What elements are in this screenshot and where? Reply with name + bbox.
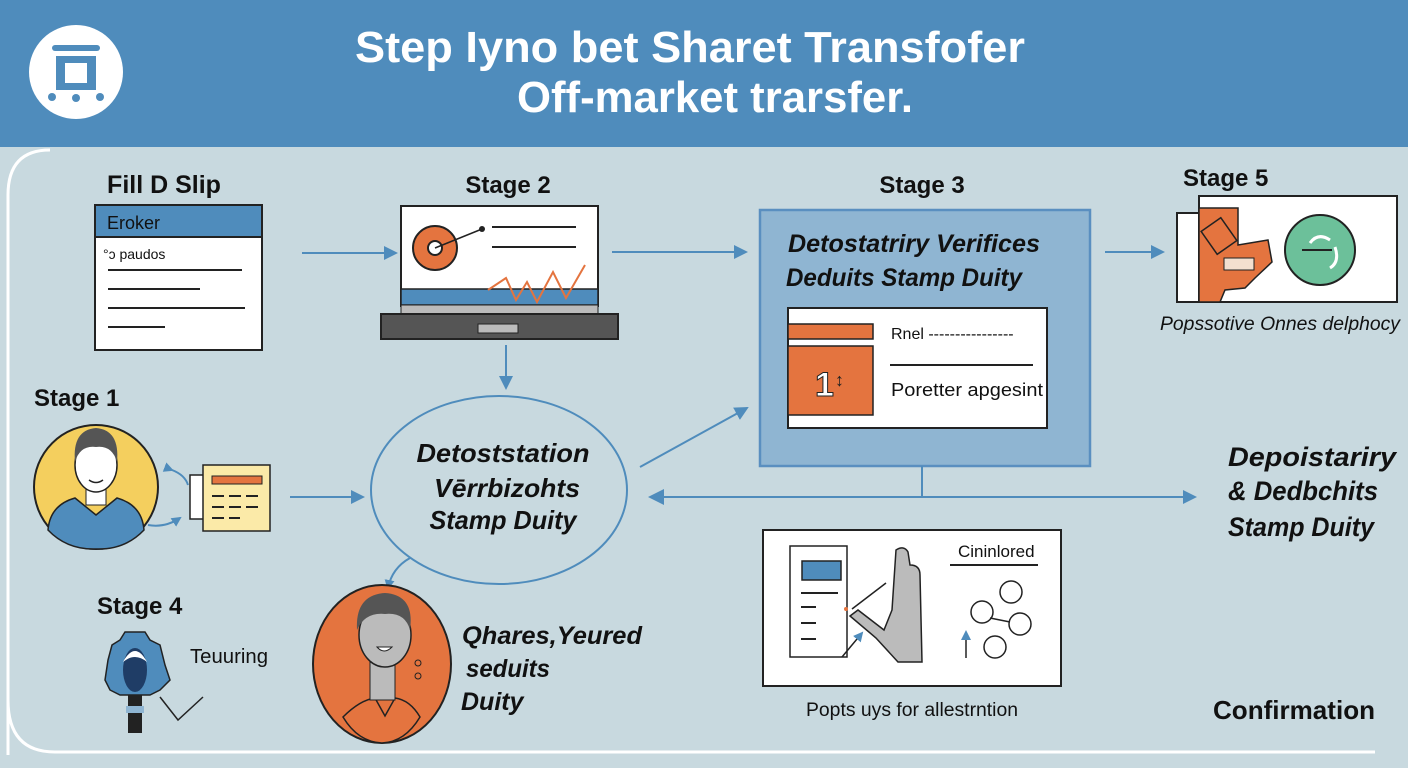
title: Step Iyno bet Sharet Transfofer — [355, 23, 1025, 72]
panel: orange person: Duity — [461, 688, 525, 716]
panel: stage 5: Stage 5 — [1183, 165, 1268, 192]
panel: stage 3: Detostatriry Verifices — [788, 230, 1040, 258]
panel: stage 3: ↕ — [835, 370, 844, 390]
arrow — [505, 345, 507, 388]
panel: stage 4: Stage 4 — [97, 593, 183, 620]
caption: Popts uys for allestrntion — [806, 700, 1018, 721]
panel: central ellipse: Vērrbizohts — [434, 473, 580, 503]
panel: central ellipse — [371, 396, 627, 584]
arrow: bidirectional connector — [648, 466, 1195, 505]
arrow — [612, 251, 746, 253]
arrow — [302, 252, 396, 254]
icon: header logo — [29, 25, 123, 119]
panel: stage 4: Teuuring — [190, 646, 268, 668]
panel: fill slip: °ↄ paudos — [103, 246, 165, 262]
curved arrow — [388, 558, 410, 588]
panel: stage 3: Deduits Stamp Duity — [786, 264, 1023, 292]
text block: depository: Stamp Duity — [1228, 512, 1376, 542]
panel: orange person: Qhares,Yeured — [462, 622, 643, 650]
panel: stage 2 laptop — [381, 172, 618, 339]
panel: stage 3 — [760, 172, 1090, 466]
panel: stage 5 — [1160, 165, 1402, 335]
panel: stage 3: Rnel ---------------- — [891, 326, 1014, 343]
panel: orange person — [313, 585, 643, 743]
panel: orange person: seduits — [466, 655, 550, 683]
panel: stage 4 — [97, 593, 268, 733]
panel: stage 1 — [34, 385, 270, 549]
text block: depository: Depoistariry — [1228, 442, 1398, 472]
panel: confirmation box: Cininlored — [958, 542, 1035, 561]
panel: stage 1: Stage 1 — [34, 385, 119, 412]
panel: stage 5: Popssotive Onnes delphocy — [1160, 314, 1402, 335]
panel: confirmation box — [763, 530, 1061, 686]
panel: central ellipse: Detoststation — [416, 438, 590, 468]
arrow — [290, 496, 363, 498]
text block: depository — [1228, 442, 1398, 542]
panel: central ellipse: Stamp Duity — [430, 505, 578, 535]
arrow — [640, 408, 747, 467]
panel: stage 2 laptop: Stage 2 — [465, 172, 551, 199]
title: Off-market trarsfer. — [517, 73, 913, 122]
text block: depository: & Dedbchits — [1228, 476, 1378, 506]
panel: stage 3: Stage 3 — [879, 172, 965, 199]
text: confirmation: Confirmation — [1213, 695, 1375, 725]
title — [355, 23, 1025, 122]
panel: fill slip — [95, 171, 262, 350]
panel: fill slip: Fill D Slip — [107, 171, 221, 199]
arrow — [1105, 251, 1163, 253]
panel: stage 3: 1 — [815, 366, 834, 404]
panel: fill slip: Eroker — [107, 213, 160, 233]
panel: stage 3: Poretter apgesint — [891, 380, 1043, 400]
header — [0, 0, 1408, 147]
